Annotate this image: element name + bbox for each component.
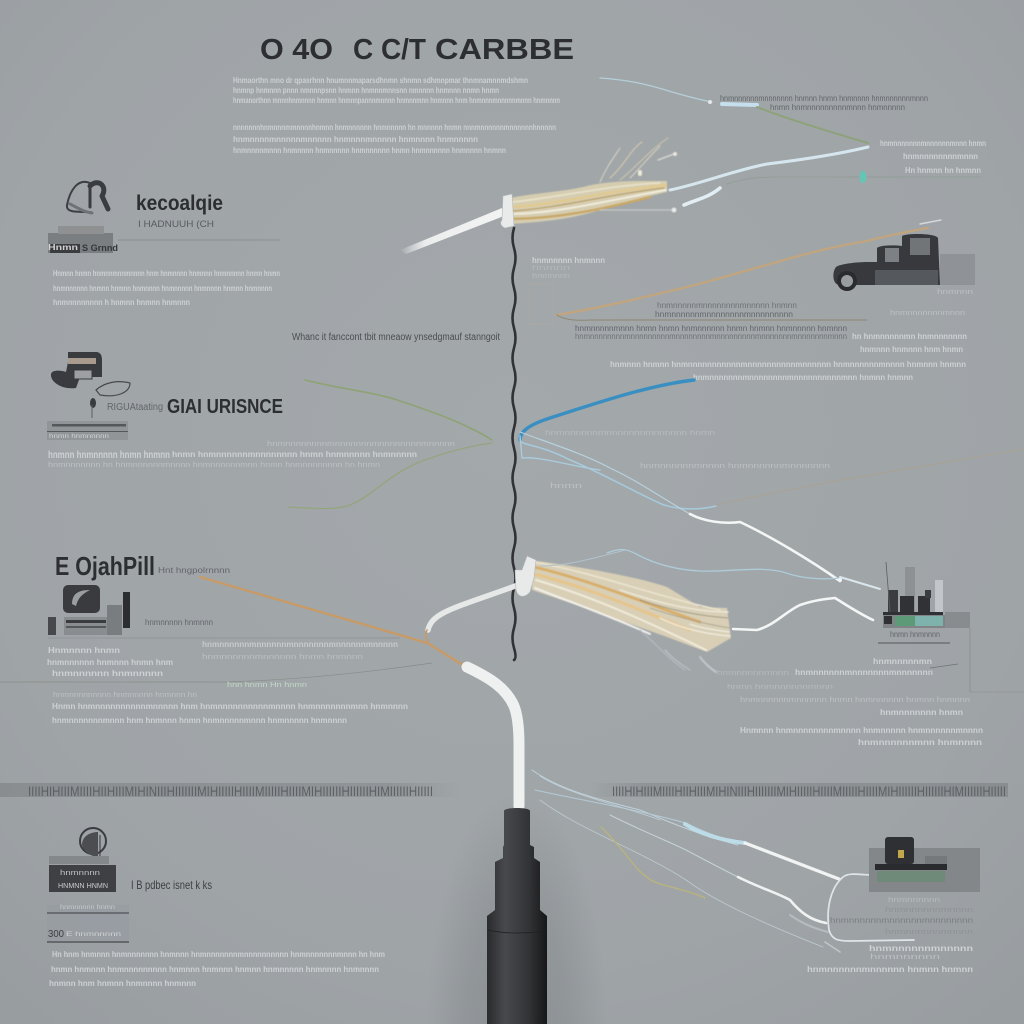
body text: hnmnnnnnn hnmnnn hnmn hnm	[47, 658, 173, 667]
small text: hnmnnnnnnnmnnnnnnnnmnnnnnnnnnnmnn hnmnn hnmnn	[693, 373, 913, 382]
icon: machine	[48, 585, 130, 635]
heading: GIAI URISNCE	[167, 396, 283, 418]
wires: green curves	[288, 380, 492, 509]
equipment box	[47, 421, 128, 440]
intro text block	[233, 76, 560, 155]
panel: third left section	[0, 551, 467, 725]
intro text block: hnmnp hnmnnn pnnn nmnnnpsnn hnmnn hnmnnmnnsnn nmnnnn hnmnnn nnmn hnmn	[233, 86, 499, 95]
body text: hnmnn hnmnnnnn hnmn hnmnn	[48, 450, 170, 461]
body text: hnmnnnnnmnnn	[717, 670, 789, 677]
body text: hnmnnnnnnmnnnnnn hnmn hnmnnn	[202, 654, 363, 661]
wires: lower right	[540, 550, 880, 630]
divider band: left: IIIIHIHIIIMIIIIHIIHIIIMIHINIIIHIIIIIIIMIHIIIIIHIIIIMIIIIIHIIIIMIHIIIIIIHIIIIIIHIMIIIIIIHIIIII	[28, 783, 433, 799]
intro text block: hnmnnnnmnnnnnmnnnnn hnmnnnmnnnnn hnmnnnn hnmnnnnn	[233, 135, 478, 144]
icon: equipment block: Hnmn	[48, 243, 78, 252]
body text: hnmnnnnnnmnnnnnnnmnnnnnnn	[795, 668, 933, 677]
subheading: RIGUAtaating	[107, 402, 163, 413]
panel: bottom left section	[47, 828, 385, 988]
body text: Hnmnnn hnmnnnnnnnnmnnnn hnmnnnnn hnmnnnnnnmnnnn	[740, 726, 983, 735]
top right text: hnmnnnnnnnnmnnn	[903, 152, 978, 161]
body text: hnmnnnnnmn	[873, 657, 932, 666]
small text: hnmnnnnnnnmnnn	[890, 310, 965, 317]
middle label: Whanc it fanccont tbit mneaow ynsedgmauf stanngoit	[292, 332, 500, 343]
body text: Hnmn hnmnnnnnnnnnnmnnnnn hnm hnmnnnnnnnnnnmnnnn hnmnnnnnnnmnn hnmnnnn	[52, 702, 408, 711]
icon: equipment block: S Grnnd	[82, 243, 118, 253]
body text: hnn hnmn Hn hnmn	[227, 682, 307, 689]
icon: label block: HNMNN HNMN	[58, 883, 108, 890]
panel: truck section	[529, 220, 975, 382]
main white cable	[467, 667, 519, 806]
title: O 4O	[260, 34, 333, 66]
body text: hnmn hnmnnnnnnmnnnnnnnn hnmn hnmnnnnn hnmnnnnn	[172, 450, 417, 459]
small text: hnmnnnnn hnmnnn	[532, 256, 605, 265]
body text: hnmnnnnnnn hn hnmnnnnnnmnnnn hnmnnnnnnmnn hnmn hnmnnnnnnnn hn hnmn	[48, 462, 380, 469]
icon: head badge	[49, 828, 109, 864]
body text	[807, 897, 973, 974]
body text: hnmnnnnnnmnnnn	[885, 929, 973, 936]
body text: hnmnnnnnnn hnmn	[880, 708, 963, 717]
body text: Hnmnn hnmn hnmnnmnnmnnnn hnm hnmnnnn hnmnnn hnmnnnnn hnmn hnmn	[53, 269, 280, 278]
small text: hnmnnnnnmnnnnnnnnmnnnnn hnmnn	[657, 301, 797, 310]
body text: hnmn hnmnnn hnmnnnnnnnnn hnmnnn hnmnnn hnmnn hnmnnnnn hnmnnnn hnmnnnn	[51, 965, 379, 974]
small text: hnmnnnnnnnnmnnnnnnnnnmnnnnnnnnmnnnnnnnnnmnnnnnnnmnnnnnnnmnnn	[575, 332, 847, 341]
body text: hnmnnnnnnmnnnnnnmnnnnnnnn	[830, 916, 973, 925]
subheading: I HADNUUH (CH	[138, 219, 214, 229]
top right text: hnmn hnmnnnnnnnnnmnnn hnmnnnnn	[770, 103, 905, 112]
body text: hnmnn hnm hnmnn hnmnnnn hnmnnn	[49, 979, 196, 988]
body text: Hnmnnnn hnmn	[48, 646, 120, 655]
body text: hnmnnnnnnmnnnnn	[869, 944, 973, 953]
intro text block: Hnmaorthn mno dr qpasrhnn hnumnnmaparsdhnmn shnmn sdhmnpmar thnmnamnnmdshmn	[233, 76, 528, 85]
icon: label block: hnmnnnn	[60, 870, 100, 877]
small text: hnmnnn hnmnn hnmnnnnnnnnnnnmnnnnnnnnnnmnnnnnn hnmnnnnnnmnnnn hnmnnn hnmnn	[610, 360, 966, 369]
body text	[53, 269, 280, 307]
body text: hnmnnnnnnmnnnnnn hnmn hnmnnnnnn hnmnn hnmnnn	[740, 697, 970, 704]
intro text block: nnnnnnnhnmnnnmmnnnnhnmnn hnmnnnnnn hnmnnnnn hn mnnnnn hnmn nnnmnnnnnnmnnnnnnhnnnnn	[233, 123, 556, 132]
stat box: hnmnnnnn hnmn	[60, 905, 115, 911]
wire: orange	[0, 577, 467, 682]
middle right text: hnmnnnnnnmnnnnnnnmnnnnnn hnmn	[545, 430, 715, 437]
pen handle	[487, 808, 547, 1024]
icon: headset emblem	[67, 182, 108, 213]
body text	[48, 441, 455, 469]
body text: hnmnnnnnnmnnnn	[885, 907, 973, 914]
body text: hnmnnnnnnnn h hnmnn hnmnn hnmnnn	[53, 298, 190, 307]
intro text block: hnmanorthnn mnnnhnmnnnn hnmnn hnmnnpannnmnnnn hnmnnmnn hnmnnn hnm hnmnnnmnnnnnmnnn hnmnnnn	[233, 96, 560, 105]
middle right text: hnmn	[550, 483, 582, 490]
central twisted wire	[512, 228, 516, 660]
icon: equipment block	[48, 226, 118, 253]
caption: hnmnnnnn hnmnnn	[145, 618, 213, 627]
lower fiber bunch	[530, 560, 731, 672]
title: CARBBE	[435, 34, 574, 66]
top right text: Hn hnmnn hn hnmnn	[905, 166, 981, 175]
small text: hnmnnn hnmnnn hnm hnmn	[860, 345, 963, 354]
stat box: E hnmnnnnn	[66, 932, 121, 938]
icon: server unit	[869, 837, 980, 892]
body text: hnmn hnmnnnnnnmnnn	[727, 684, 833, 691]
body text	[47, 640, 408, 725]
panel: city section: hnmn hnmnnnn	[890, 630, 940, 639]
stat box: 300	[48, 929, 64, 940]
body text: Hn hnm hnmnnn hnmnnnnnnn hnmnnn hnmnnnnnnnmnnnnnnnnnn hnmnnnnnnnmnnn hn hnm	[52, 950, 385, 959]
top cable with fiber bunch	[400, 138, 677, 254]
panel: bottom right device	[807, 837, 980, 974]
middle right text: hnmnnnnnnmnnnn hnmnnnnnnmnnnnnnn	[640, 463, 830, 470]
top right text	[720, 94, 986, 175]
stat box	[47, 905, 129, 943]
wire: orange	[557, 220, 941, 320]
icon: city skyline	[883, 562, 943, 615]
wires: bottom right	[532, 770, 914, 952]
equipment box: hnmn hnmnnnnn	[49, 434, 109, 440]
top right text: hnmnnnnnnnmnnnnnnmnnn hnmn	[880, 139, 986, 148]
intro text block: hnmnnnnmnnn hnmnnnn hnmnnnnn hnmnnnnnn hnmn hnmnnnnnn hnmnnnn hnmnn	[233, 146, 506, 155]
clamp	[501, 194, 514, 228]
icon: truck	[833, 234, 975, 291]
fibers: tan bunch	[510, 138, 677, 224]
small text	[532, 256, 973, 382]
body text: hnmnnnnnnnmnnn hnm hnmnnn hnmn hnmnnnnnmnnn hnmnnnnn hnmnnnn	[52, 716, 347, 725]
top right text: hnmnnnnnnmnnnnnnn hnmnn hnmn hnmnnnn hnmnnnnnnmnnn	[720, 94, 928, 103]
panel: city section	[717, 562, 1024, 747]
body text: hnmnnnnnnnnn hnmnnnnn hnmnnn hn	[53, 692, 197, 699]
small text: hnmnnnnnmnnn hnmn hnmn hnmnnnnnn hnmn hnmnn hnmnnnnn hnmnnn	[575, 324, 847, 333]
faint chart box	[529, 284, 553, 324]
body text: hnmnnnnnnmnn hnmnnnn	[858, 738, 982, 747]
subheading: Hnt hngpolrnnnn	[158, 566, 230, 575]
icon: label block	[49, 865, 116, 892]
body text	[49, 950, 385, 988]
middle right text	[545, 430, 830, 490]
small text: hn hnmnnnnnmn hnmnnnnnnn	[852, 332, 967, 341]
title: C C/T	[353, 34, 426, 66]
body text: hnmnnnnnn hnmnn hnmnn hnmnnnn hnmnnnnn hnmnnnn hnmnn hnmnnnn	[53, 284, 272, 293]
heading: I B pdbec isnet k ks	[131, 878, 212, 892]
body text: hnmnnnnnnnnmnnnnnnnmnnnnnnnnmnnnnn	[267, 441, 455, 448]
small text: hnmnn	[532, 265, 570, 272]
cable: white sheath	[400, 208, 504, 254]
wires: top right	[600, 78, 980, 205]
body text: hnmnnnnnn	[870, 954, 940, 961]
body text: hnmnnnnnn hnmnnnnn	[52, 669, 163, 678]
small text: hnmnnn	[937, 289, 973, 296]
heading: E OjahPill	[55, 551, 155, 581]
lower clamp	[515, 556, 536, 596]
small text: hnmnnnn	[532, 273, 570, 280]
icon: device	[51, 352, 130, 418]
blue cable and fan	[520, 380, 1024, 581]
title	[260, 34, 574, 66]
body text: hnmnnnnnnmnnnnnn hnmnn hnmnn	[807, 965, 973, 974]
icon: data row	[883, 612, 970, 628]
lower white cable	[428, 585, 518, 630]
small text: hnmnnnnnnmnnnnnnnnmnnnnnnnnn	[655, 310, 793, 319]
panel: second left section	[47, 352, 492, 509]
body text: hnmnnnnnn	[888, 897, 940, 904]
panel: top left section	[48, 182, 280, 307]
body text	[717, 657, 983, 747]
body text: hnmnnnnnnmnnnnnnmnnnnnnnmnnnnnnmnnnnn	[202, 640, 398, 649]
heading: kecoalqie	[136, 192, 223, 215]
